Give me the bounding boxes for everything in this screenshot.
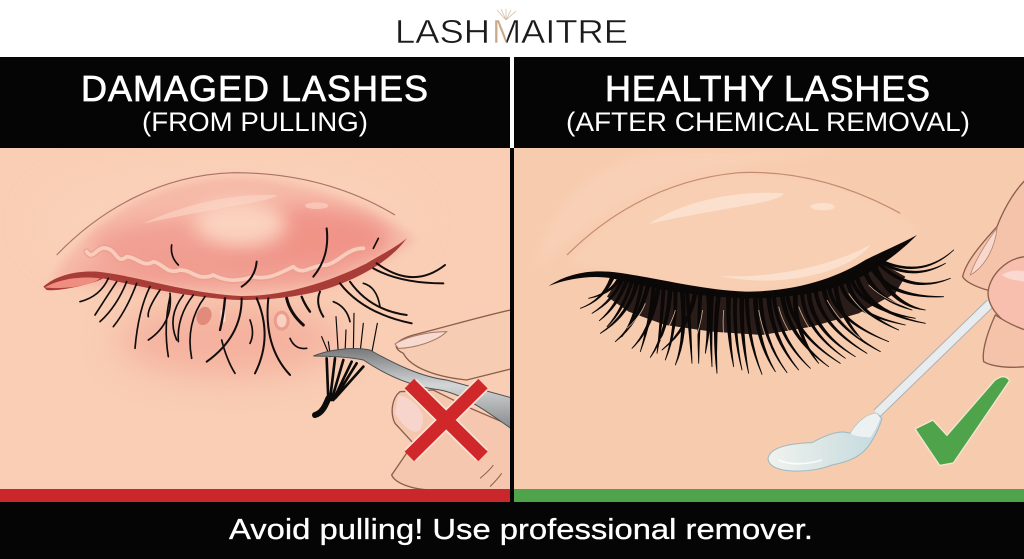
inflamed skin glow	[40, 160, 417, 377]
fingertips	[983, 257, 1024, 367]
brow bone shade	[556, 159, 717, 237]
hand: lower fingers	[392, 390, 513, 490]
panel: damaged lashes	[0, 148, 513, 490]
closed eyelid	[569, 173, 917, 292]
footer caption	[0, 502, 1024, 559]
green check mark	[917, 378, 1008, 464]
logo: Lashmaitre: AITRE	[521, 13, 628, 50]
lash gap highlights	[627, 285, 907, 347]
eyeliner lash line	[549, 235, 917, 298]
lash line	[43, 238, 407, 300]
red X mark	[409, 384, 483, 456]
status bar: red	[0, 489, 510, 502]
header: healthy lashes: (AFTER CHEMICAL REMOVAL)	[566, 107, 970, 137]
header: healthy lashes	[514, 57, 1024, 148]
eyelid crease	[57, 173, 395, 255]
tweezers	[313, 349, 513, 430]
cotton swab stick	[877, 303, 990, 413]
hand holding swab	[963, 180, 1024, 290]
dense lash mass	[607, 262, 905, 335]
healthy lashes	[580, 250, 954, 374]
lid highlights	[143, 195, 328, 223]
cotton swab head with gel	[768, 413, 882, 471]
sparse broken lashes	[80, 228, 445, 375]
status bar: green	[514, 489, 1024, 502]
footer caption: Avoid pulling! Use professional remover.	[229, 514, 813, 546]
hand: index finger	[396, 309, 513, 380]
header: damaged lashes: DAMAGED LASHES	[81, 68, 428, 109]
irritated crusted lid margin	[87, 248, 363, 280]
logo: Lashmaitre: M	[492, 13, 521, 50]
lid highlights	[649, 193, 870, 281]
removed lash cluster	[315, 313, 377, 415]
panel: healthy lashes	[514, 148, 1024, 489]
eyelid crease	[567, 172, 900, 255]
inner lid rim	[45, 277, 100, 288]
panel divider	[510, 148, 514, 502]
fingernail	[395, 332, 447, 348]
header: healthy lashes: HEALTHY LASHES	[605, 68, 930, 109]
header: damaged lashes	[0, 57, 510, 148]
header: damaged lashes: (FROM PULLING)	[142, 107, 368, 137]
logo: Lashmaitre	[395, 9, 628, 50]
logo: Lashmaitre: LASH	[395, 13, 490, 50]
swollen spots	[194, 305, 290, 331]
